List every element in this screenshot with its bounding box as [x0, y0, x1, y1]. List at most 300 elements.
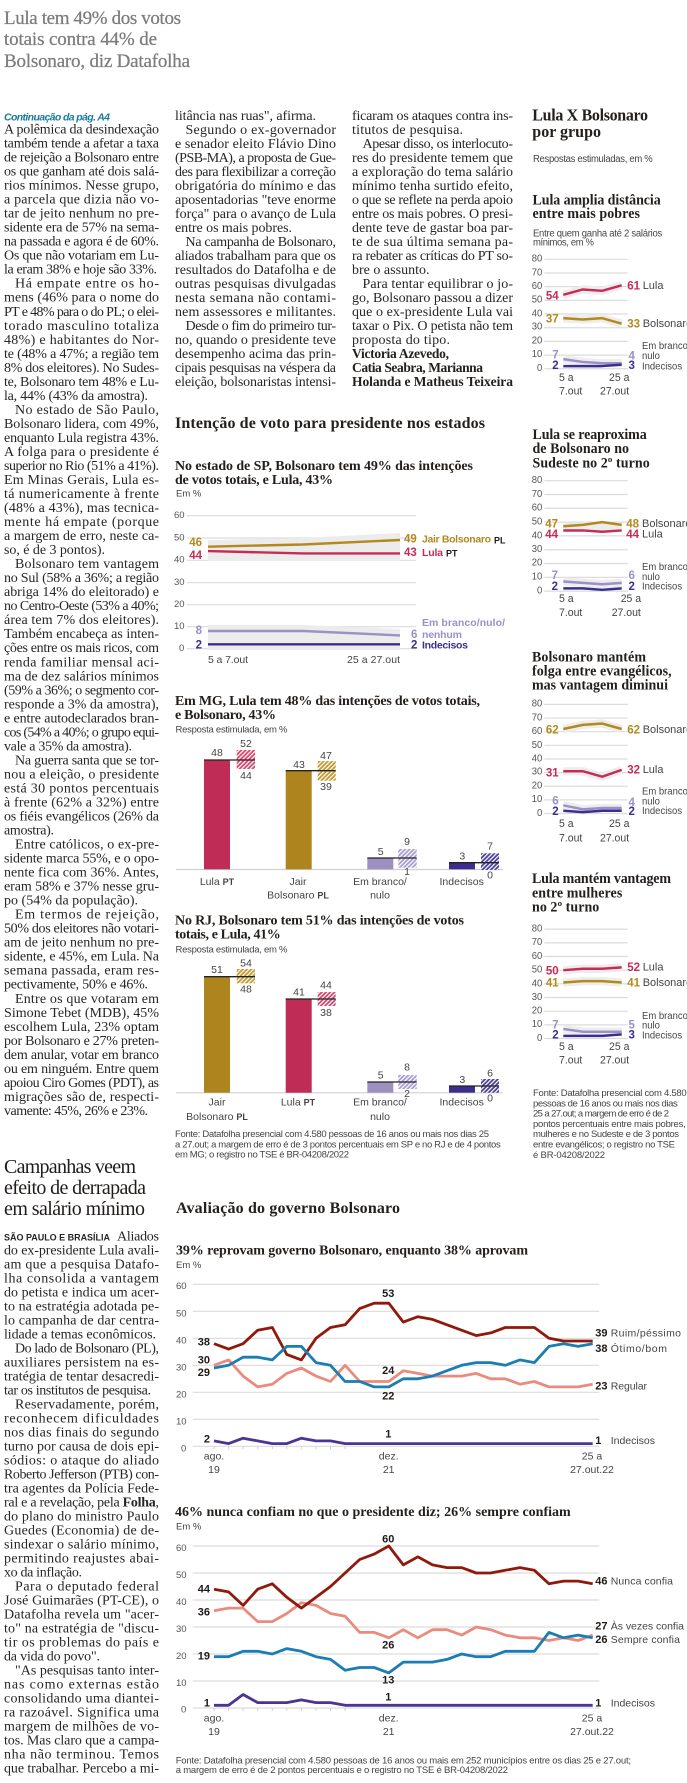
axis: 0	[537, 363, 542, 374]
panel: approval line chart	[176, 1244, 681, 1476]
panel: small chart, evangélicos	[532, 649, 687, 844]
source note: Fonte: Datafolha presencial com 4.580 pessoas de 16 anos ou mais em 252 municípios entre os dias 25 e 27.out;	[176, 1755, 631, 1766]
article column 1: rios mínimos. Nesse grupo,	[4, 179, 159, 194]
line: indecisos	[214, 1694, 593, 1705]
source note	[176, 1755, 631, 1776]
byline	[352, 346, 513, 389]
value labels: 53	[382, 1288, 394, 1300]
article column 1: está 30 pontos percentuais	[4, 782, 159, 796]
bar: Lula	[281, 980, 336, 1109]
bar: Bolsonaro: Jair	[209, 1097, 226, 1109]
x axis labels: 27.out	[612, 607, 641, 619]
value labels: 44	[189, 550, 203, 562]
value labels: 4	[628, 796, 635, 809]
axis: 80	[532, 924, 542, 935]
axis: 10	[532, 794, 542, 805]
byline: Holanda e Matheus Teixeira	[352, 374, 513, 389]
series legend: Indecisos	[642, 362, 682, 373]
axis	[176, 1543, 599, 1716]
article column 1: apoiou Ciro Gomes (PDT), as	[4, 1076, 159, 1091]
article column 1: (59% a 36%; o segmento cor-	[4, 683, 159, 698]
value labels: 2	[552, 580, 558, 593]
line: nunca confia	[214, 1546, 593, 1608]
axis: 40	[532, 308, 542, 319]
axis	[176, 1281, 599, 1454]
value labels: 60	[382, 1534, 394, 1546]
article 2 body: lha consolida a vantagem	[4, 1272, 159, 1286]
series legend	[642, 724, 687, 817]
sidebar source note: 25 a 27.out; a margem de erro é de 2	[533, 1109, 669, 1120]
value labels: 1	[385, 1428, 391, 1440]
article column 3: Para tentar equilibrar o jo-	[362, 277, 513, 292]
bar: em branco/nulo: 9	[404, 836, 410, 848]
bar: indecisos: 0	[487, 870, 493, 882]
article 2 body: am que a pesquisa Datafo-	[4, 1258, 159, 1272]
article column 2: outras pesquisas divulgadas	[175, 277, 336, 292]
article column 1: Bolsonaro tem vantagem	[15, 557, 159, 572]
x axis labels: 25 a	[621, 593, 641, 605]
value labels: 6	[552, 794, 559, 807]
bar: Bolsonaro: 54	[240, 957, 252, 969]
x axis labels: 21	[383, 1726, 395, 1738]
bar: Lula: 41	[293, 987, 305, 999]
value labels: 33	[627, 317, 641, 331]
article column 3: entre os mais pobres. O presi-	[352, 207, 513, 222]
bar: Bolsonaro: 51	[211, 964, 223, 976]
article 2 body: tra agentes da Polícia Fede-	[4, 1482, 159, 1496]
bar: Bolsonaro: 47	[320, 750, 332, 762]
x axis labels: 25 a	[609, 818, 629, 830]
article column 1: Entre os que votaram em	[15, 992, 159, 1007]
axis	[532, 253, 628, 374]
article column 2: resultados do Datafolha e de	[175, 263, 336, 278]
axis: 80	[532, 475, 542, 486]
value labels: 38	[595, 1343, 608, 1355]
series legend: Lula	[643, 764, 664, 776]
value labels: 49	[404, 534, 417, 546]
value labels: 3	[628, 359, 635, 372]
article 2 body: lidade a temas econômicos.	[4, 1328, 156, 1342]
bar: indecisos: Indecisos	[440, 1097, 484, 1109]
chart title: Lula amplia distância	[533, 192, 661, 208]
axis: 30	[532, 767, 542, 778]
article column 1: ções entre os mais ricos, com	[4, 641, 159, 656]
article column 3: que o ex-presidente Lula vai	[352, 305, 513, 320]
article column 1: área tem 7% dos eleitores).	[4, 613, 159, 628]
series legend: nulo	[642, 572, 660, 583]
value labels: 1	[595, 1435, 601, 1447]
article column 1: sidente era de 57% na sema-	[4, 221, 159, 236]
series legend: Indecisos	[642, 806, 682, 817]
article column 1: so, é de 3 pontos).	[4, 543, 105, 558]
chart title: totais, e Lula, 41%	[175, 928, 281, 942]
article column 1: de rejeição a Bolsonaro entre	[4, 150, 159, 166]
article column 3: Apesar disso, os interlocuto-	[362, 137, 513, 152]
chart title: no 2º turno	[532, 899, 599, 916]
bar: Bolsonaro: Bolsonaro PL	[186, 1111, 248, 1123]
article column 2: desempenho acima das prin-	[175, 347, 336, 362]
chart title: de Bolsonaro no	[533, 441, 629, 457]
article column 3: mínimo tenha surtido efeito,	[352, 179, 513, 194]
series legend	[422, 534, 506, 652]
article column 1: Em termos de rejeição,	[15, 908, 159, 923]
bar: Bolsonaro: 43	[293, 759, 305, 771]
bar: indecisos: 6	[487, 1067, 493, 1079]
article column 1: sidente, e 45%, em Lula. Na	[4, 950, 160, 965]
sidebar note: Respostas estimuladas, em %	[533, 154, 653, 165]
article column 1: Em Minas Gerais, Lula es-	[4, 473, 159, 488]
article column 3: bre o assunto.	[352, 263, 430, 278]
value labels: 6	[628, 569, 635, 582]
article 2 body: José Guimarães (PT-CE), o	[4, 1594, 159, 1608]
value labels: 6	[411, 629, 417, 641]
line: sempre confia	[214, 1632, 593, 1673]
series legend: Indecisos	[611, 1435, 655, 1447]
article column 3	[352, 109, 513, 389]
panel: small chart, mais pobres	[532, 192, 687, 398]
axis: 50	[532, 740, 542, 751]
bar: Bolsonaro: 39	[320, 781, 332, 793]
x axis labels: 7.out	[559, 607, 582, 619]
chart title: No RJ, Bolsonaro tem 51% das intenções de votos	[175, 914, 465, 928]
article 2 body: xo da inflação.	[4, 1566, 82, 1580]
lines	[563, 724, 622, 812]
article column 1: Simone Tebet (MDB), 45%	[4, 1006, 159, 1021]
axis	[532, 924, 628, 1044]
article column 2: Desde o fim do primeiro tur-	[186, 319, 336, 334]
axis: 60	[532, 281, 542, 292]
unit note: Entre quem ganha até 2 salários	[533, 228, 662, 239]
axis: 80	[532, 698, 542, 710]
value labels: 48	[626, 517, 640, 531]
axis: 20	[532, 781, 542, 792]
axis: 10	[532, 571, 542, 583]
x axis labels: 25 a	[609, 1041, 629, 1053]
article column 2: força" para o avanço de Lula	[175, 207, 337, 222]
article column 2: entre os mais pobres.	[175, 221, 292, 236]
article column 3: taxar o Pix. O petista não tem	[352, 319, 513, 334]
axis: 10	[532, 349, 542, 360]
series legend: Em branco/nulo/	[422, 617, 505, 629]
bar: Lula: 52	[240, 738, 252, 750]
line: ruim/péssimo	[214, 1303, 593, 1360]
article column 1: po (54% da população).	[4, 894, 138, 909]
article column 1: nente fica com 36%. Antes,	[4, 866, 159, 881]
value labels: 7	[552, 569, 558, 582]
bar: em branco/nulo	[353, 1062, 417, 1123]
axis: 30	[176, 1362, 187, 1374]
article 2 body: que trabalhar. Percebo a mi-	[4, 1762, 159, 1776]
article column 2: nesta semana não contami-	[175, 291, 336, 306]
article 2 body: tir os problemas do país e	[4, 1636, 159, 1650]
value labels: 46	[189, 537, 202, 549]
axis: 60	[532, 502, 542, 513]
value labels: 7	[552, 348, 559, 361]
panel: small chart, mulheres	[532, 871, 687, 1066]
article column 1: à frente (62% a 32%) entre	[4, 796, 159, 810]
series legend: PL	[494, 536, 506, 546]
article column 3: go, Bolsonaro passou a dizer	[352, 291, 513, 306]
panel: São Paulo line chart	[174, 459, 506, 666]
article column 1: la eram 38% e hoje são 33%.	[4, 263, 157, 278]
axis: 20	[176, 1651, 187, 1662]
value labels: 62	[546, 724, 559, 737]
bar: Bolsonaro: Bolsonaro PL	[267, 890, 329, 902]
x axis labels	[559, 593, 641, 619]
bar: em branco/nulo: 5	[378, 1069, 384, 1081]
article 2 body: nos dias finais do segundo	[4, 1426, 159, 1440]
article 2 body: Datafolha revela um "acer-	[4, 1608, 159, 1622]
series legend: nenhum	[422, 629, 462, 641]
series legend: Regular	[611, 1381, 648, 1393]
bar: Lula: 38	[320, 1007, 332, 1019]
x axis labels: 7.out	[559, 832, 582, 844]
article column 1: tar de jeito nenhum no pre-	[4, 207, 159, 222]
article column 2: litância nas ruas", afirma.	[175, 109, 316, 124]
article column 2: aposentadorias "teve enorme	[175, 193, 336, 208]
article column 1: (48% a 43%), mas tecnica-	[4, 501, 159, 516]
panel: Rio de Janeiro bar chart	[175, 914, 503, 1161]
axis: 60	[176, 1543, 187, 1554]
axis	[174, 510, 416, 654]
article column 3: ficaram os ataques contra ins-	[352, 109, 513, 124]
x axis labels: 5 a	[559, 593, 574, 605]
article column 1: PT e 48% para o do PL; o elei-	[4, 305, 159, 320]
series legend: Nunca confia	[611, 1575, 673, 1587]
axis: 70	[532, 937, 542, 948]
bar: indecisos: 7	[487, 841, 493, 853]
section heading: state voting intention: Intenção de voto para presidente nos estados	[175, 415, 485, 432]
article column 1: a margem de erro, neste ca-	[4, 529, 159, 544]
sidebar heading: Lula x Bolsonaro por grupo: por grupo	[532, 123, 601, 141]
margin bands	[208, 533, 400, 650]
bar: em branco/nulo: 2	[404, 1088, 410, 1100]
article column 1: Os que não votariam em Lu-	[4, 249, 159, 264]
x axis labels: 27.out	[600, 385, 629, 398]
article column 1: por Bolsonaro e 27% preten-	[4, 1034, 159, 1049]
axis: 10	[176, 1416, 187, 1428]
axis: 60	[174, 510, 185, 521]
series legend: Lula	[643, 280, 664, 292]
article column 1: Há empate entre os ho-	[15, 277, 159, 292]
source note: a margem de erro é de 2 pontos percentuais e o registro no TSE é BR-04208/2022	[176, 1765, 508, 1776]
value labels: 44	[626, 528, 640, 541]
article column 1: abriga 14% do eleitorado) e	[4, 585, 159, 600]
value labels: 27	[595, 1620, 608, 1632]
value labels: 37	[546, 312, 559, 325]
bar: em branco/nulo: Em branco/	[353, 1097, 407, 1109]
article column 1: A folga para o presidente é	[4, 445, 159, 460]
value labels: 54	[546, 289, 559, 302]
sidebar source note: mulheres e no Sudeste e de 3 pontos	[533, 1129, 679, 1140]
axis: 0	[181, 1704, 186, 1716]
axis: 30	[532, 992, 542, 1003]
value labels: 23	[595, 1381, 608, 1393]
bar: em branco/nulo: 1	[404, 866, 410, 878]
article 2 body: Aliados	[117, 1230, 159, 1244]
value labels: 30	[198, 1354, 210, 1366]
value labels: 50	[546, 964, 559, 977]
x axis labels: dez.	[379, 1451, 399, 1463]
line: ótimo/bom	[214, 1344, 593, 1387]
value labels: 39	[595, 1327, 608, 1339]
article 2 body: sódios: o ataque do aliado	[4, 1454, 159, 1468]
article column 2: des para flexibilizar a correção	[175, 165, 336, 180]
article column 1: escolhem Lula, 23% optam	[4, 1020, 159, 1035]
x axis labels: 25 a	[582, 1451, 602, 1463]
value labels: 43	[404, 547, 417, 559]
value labels: 46	[595, 1575, 608, 1587]
article column 1: na passada e agora é de 60%.	[4, 235, 159, 250]
value labels: 4	[628, 349, 635, 363]
article 2 body: SÃO PAULO E BRASÍLIA	[4, 1232, 110, 1242]
x axis labels: ago.	[204, 1451, 224, 1463]
series legend: Indecisos	[611, 1697, 655, 1709]
unit note: Resposta estimulada, em %	[176, 724, 288, 736]
line: indecisos	[214, 1438, 593, 1444]
article 2 body: nas como externas estão	[4, 1678, 159, 1692]
article 2 body: lo campanha de dar centra-	[4, 1314, 159, 1328]
value labels: 1	[595, 1697, 601, 1709]
series legend	[642, 280, 687, 373]
value labels: 19	[198, 1651, 210, 1663]
axis: 60	[532, 951, 542, 962]
sidebar heading: Lula x Bolsonaro por grupo	[532, 106, 648, 141]
value labels: 1	[385, 1691, 391, 1703]
lines	[563, 285, 622, 366]
series legend: Indecisos	[642, 581, 682, 593]
bar: indecisos: 0	[487, 1093, 493, 1105]
chart title: e Bolsonaro, 43%	[175, 708, 276, 723]
x axis labels: 25 a	[609, 372, 629, 384]
value labels	[189, 534, 417, 652]
axis: 40	[532, 978, 542, 989]
bar: indecisos	[440, 841, 499, 888]
article column 1: os fiéis evangélicos (26% da	[4, 810, 160, 824]
axis: 70	[532, 489, 542, 500]
x axis labels	[208, 654, 400, 666]
value labels: 38	[198, 1336, 210, 1348]
article column 2: no, quando o presidente teve	[175, 333, 336, 348]
article 2 body: tratégia de tentar desacredi-	[4, 1370, 159, 1384]
baseline	[176, 1092, 503, 1094]
bar: Lula: Lula PT	[281, 1097, 316, 1109]
bar: em branco/nulo: 8	[404, 1062, 410, 1074]
axis: 80	[532, 253, 542, 265]
value labels	[545, 517, 640, 593]
article 2 body: Reservadamente, porém,	[15, 1398, 159, 1412]
chart title: Em MG, Lula tem 48% das intenções de votos totais,	[175, 694, 480, 709]
bar: Lula: 44	[320, 980, 332, 992]
lines	[208, 540, 400, 644]
axis: 50	[176, 1308, 187, 1320]
bar: indecisos: 3	[459, 1074, 465, 1086]
unit note	[533, 228, 662, 249]
value labels: 5	[628, 1018, 635, 1031]
value labels: 62	[627, 724, 641, 737]
article column 1: mente há empate (porque	[4, 515, 159, 530]
series legend: Jair Bolsonaro	[422, 534, 491, 546]
article column 1: 48%) e habitantes do Nor-	[4, 333, 159, 348]
article column 2: Segundo o ex-governador	[186, 123, 336, 138]
chart title: Lula mantém vantagem	[532, 871, 671, 887]
axis: 0	[537, 808, 542, 819]
series legend	[611, 1327, 681, 1447]
value labels: 3	[628, 1029, 635, 1042]
value labels	[546, 961, 641, 1042]
axis: 0	[181, 1444, 186, 1454]
article 2 body: permitindo reajustes abai-	[4, 1552, 159, 1566]
byline: Victoria Azevedo,	[352, 346, 449, 361]
axis: 70	[532, 712, 542, 724]
article column 1: Bolsonaro lidera, com 49%,	[4, 417, 159, 432]
x axis labels: 7.out	[559, 1054, 582, 1066]
article column 1	[4, 112, 160, 1119]
x axis labels: 7.out	[559, 385, 582, 398]
value labels: 2	[628, 805, 635, 818]
axis: 60	[176, 1281, 187, 1292]
bar: Bolsonaro	[267, 750, 336, 902]
article column 1: Entre católicos, o ex-pre-	[15, 838, 159, 852]
article column 1: amostra).	[4, 824, 54, 838]
value labels: 36	[198, 1606, 210, 1618]
article 2 body: "As pesquisas tanto inter-	[15, 1664, 159, 1678]
value labels	[198, 1534, 608, 1709]
value labels: 41	[627, 976, 641, 990]
article column 3: dente teve de gastar boa par-	[352, 221, 513, 236]
axis: 70	[532, 267, 542, 279]
article column 1: no Centro-Oeste (53% a 40%;	[4, 599, 159, 614]
value labels: 2	[204, 1433, 210, 1445]
article column 1: te, Bolsonaro tem 48% e Lu-	[4, 375, 159, 390]
source note: em MG; o registro no TSE é BR-04208/2022	[175, 1150, 349, 1161]
chart title	[175, 459, 474, 488]
article 2 body: Para o deputado federal	[15, 1580, 159, 1594]
article column 1: 8% dos eleitores). No Sudes-	[4, 361, 159, 376]
chart title: mas vantagem diminui	[532, 677, 668, 694]
x axis labels: dez.	[379, 1713, 399, 1725]
x axis labels: 25 a	[582, 1713, 602, 1725]
x axis labels: 27.out.22	[570, 1726, 614, 1738]
article column 2: Na campanha de Bolsonaro,	[186, 235, 336, 250]
article column 1: cos (54% a 40%; o grupo equi-	[4, 725, 159, 740]
bar: Lula	[200, 738, 255, 888]
article column 2: (PSB-MA), a proposta de Gue-	[175, 151, 336, 166]
x axis labels	[204, 1451, 614, 1476]
x axis labels: 27.out.22	[570, 1464, 614, 1476]
article 2 body: do petista e indica um acer-	[4, 1286, 159, 1300]
chart title: No estado de SP, Bolsonaro tem 49% das intenções	[175, 459, 474, 474]
series legend: Lula	[422, 547, 443, 559]
axis: 0	[179, 643, 184, 654]
series legend	[642, 518, 687, 593]
axis: 30	[174, 577, 185, 588]
chart title: Sudeste no 2º turno	[533, 455, 650, 472]
chart title	[175, 914, 465, 942]
article 2 headline: em salário mínimo	[4, 1198, 145, 1220]
axis: 10	[532, 1019, 542, 1030]
value labels: 2	[628, 580, 635, 593]
sidebar source note: Fonte: Datafolha presencial com 4.580	[533, 1088, 687, 1099]
axis: 10	[174, 621, 185, 632]
article column 1: tá numericamente à frente	[4, 487, 159, 502]
source note: Fonte: Datafolha presencial com 4.580 pessoas de 16 anos ou mais nos dias 25	[175, 1129, 489, 1140]
article 2 body: tos. Mas claro que a campa-	[4, 1734, 159, 1748]
baseline	[176, 868, 503, 870]
article column 1: am de jeito nenhum no pre-	[4, 936, 159, 951]
unit note: Em %	[176, 488, 202, 500]
article column 1: Também encabeça as inten-	[4, 627, 159, 642]
